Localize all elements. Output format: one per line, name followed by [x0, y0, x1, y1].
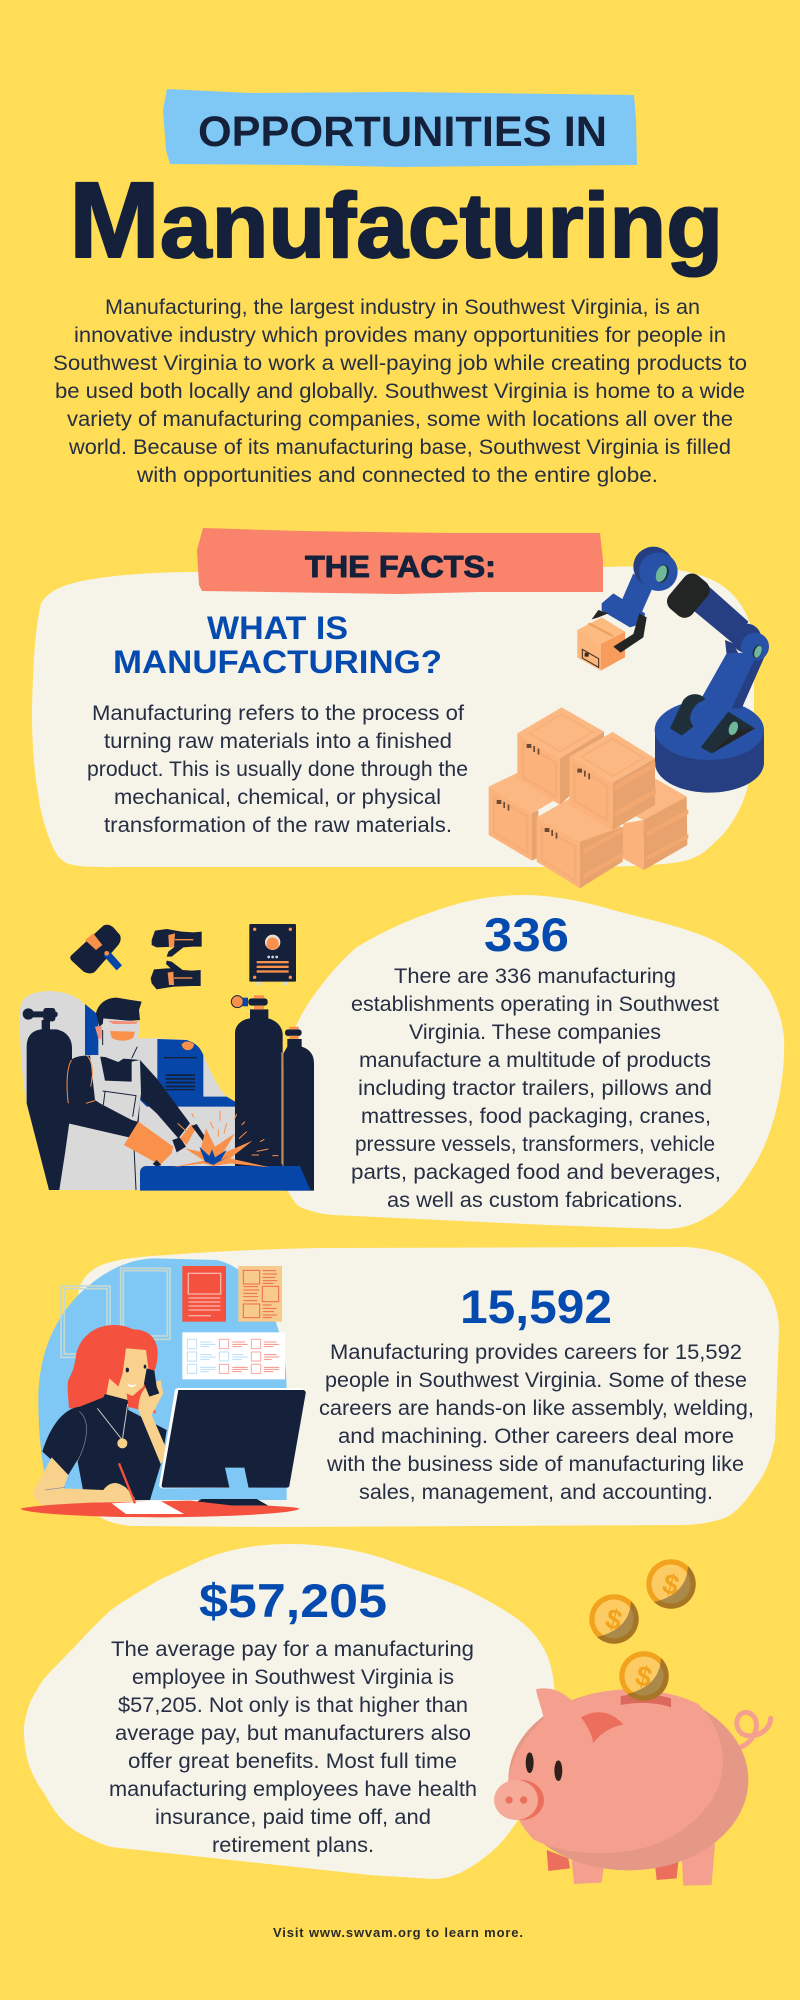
text: 336 description: including tractor trailers, pillows and: [358, 1077, 712, 1100]
illustration: piggy bank: [494, 1688, 771, 1886]
text: manufacturing definition: transformation of the raw materials.: [104, 814, 452, 837]
text: pay description: $57,205. Not only is that higher than: [118, 1694, 468, 1717]
stat: 336: 336: [484, 908, 569, 961]
pig body highlight: [508, 1689, 723, 1853]
poster orange: [238, 1266, 282, 1322]
footer text: Visit www.swvam.org to learn more.: [273, 1925, 523, 1940]
pig back legs: [547, 1850, 678, 1880]
text: 336 description: parts, packaged food and beverages,: [351, 1161, 721, 1184]
heading: what is manufacturing: WHAT IS: [207, 610, 348, 646]
illustration: woman at desk: [21, 1258, 306, 1517]
text: 336 description: as well as custom fabrications.: [387, 1189, 683, 1212]
text: manufacturing definition: Manufacturing refers to the process of: [92, 702, 464, 725]
robot base: [655, 700, 764, 793]
intro text block: with opportunities and connected to the entire globe.: [136, 464, 658, 487]
text: careers description: and machining. Other careers deal more: [338, 1425, 734, 1448]
text: manufacturing definition: [87, 702, 468, 837]
pig eyes: [526, 1752, 562, 1781]
panel: $57,205 pay: [24, 1544, 555, 1879]
text: 336 description: manufacture a multitude of products: [359, 1049, 711, 1072]
intro text block: variety of manufacturing companies, some with locations all over the: [67, 408, 733, 431]
banner: the facts: [197, 528, 603, 594]
text: careers description: careers are hands-on like assembly, welding,: [319, 1397, 754, 1420]
wall frames: [61, 1268, 170, 1357]
title: Manufacturing: [69, 159, 723, 280]
checklist: [182, 1332, 285, 1379]
coin top right: [646, 1559, 696, 1609]
text: pay description: employee in Southwest Virginia is: [132, 1666, 454, 1689]
text: careers description: [319, 1341, 754, 1504]
illustration: robot arm and boxes: [489, 547, 769, 888]
text: 336 description: [351, 965, 721, 1212]
text: 336 description: There are 336 manufacturing: [394, 965, 676, 988]
gas cylinder left: [23, 1008, 72, 1190]
poster red: [182, 1266, 226, 1322]
coins: [589, 1559, 696, 1701]
carried box: [577, 617, 625, 671]
text: careers description: people in Southwest Virginia. Some of these: [325, 1369, 747, 1392]
panel: what is manufacturing: [32, 566, 754, 867]
ear patch: [581, 1712, 623, 1743]
text: pay description: [109, 1638, 477, 1857]
heading banner: opportunities in: [163, 89, 637, 167]
intro text block: world. Because of its manufacturing base, Southwest Virginia is filled: [68, 436, 731, 459]
intro text block: Southwest Virginia to work a well-paying job while creating products to: [53, 352, 747, 375]
coin top right: $: [659, 1567, 683, 1602]
computer monitor: [159, 1388, 306, 1506]
intro text block: Manufacturing, the largest industry in Southwest Virginia, is an: [105, 296, 700, 319]
text: manufacturing definition: product. This is usually done through the: [87, 758, 468, 781]
crate stack: [489, 707, 688, 888]
banner: the facts: THE FACTS:: [305, 549, 496, 584]
heading banner: opportunities in: OPPORTUNITIES IN: [198, 108, 607, 156]
heading: what is manufacturing: MANUFACTURING?: [113, 644, 442, 680]
text: pay description: offer great benefits. Most full time: [128, 1750, 457, 1773]
stat: $57,205: $57,205: [199, 1574, 387, 1627]
coin left: $: [602, 1602, 626, 1637]
text: pay description: retirement plans.: [212, 1834, 374, 1857]
stat: 15,592: 15,592: [460, 1280, 612, 1333]
text: pay description: average pay, but manufacturers also: [115, 1722, 471, 1745]
text: manufacturing definition: mechanical, chemical, or physical: [114, 786, 441, 809]
pig ear: [536, 1688, 575, 1725]
blue machine: [85, 1004, 235, 1107]
icon: welding gloves: [151, 929, 202, 989]
text: manufacturing definition: turning raw materials into a finished: [104, 730, 452, 753]
text: careers description: sales, management, and accounting.: [359, 1481, 713, 1504]
text: 336 description: mattresses, food packaging, cranes,: [361, 1105, 711, 1128]
text: pay description: manufacturing employees have health: [109, 1778, 477, 1801]
text: 336 description: establishments operating in Southwest: [351, 993, 719, 1016]
crate back right: [623, 778, 688, 870]
heading: what is manufacturing: [113, 610, 442, 680]
pig tail: [737, 1712, 771, 1747]
gas cylinder short: [281, 1027, 314, 1191]
blue backdrop: [38, 1258, 287, 1500]
welding sparks: [172, 1111, 278, 1167]
welding table: [140, 1166, 311, 1191]
text: 336 description: Virginia. These companies: [409, 1021, 661, 1044]
crate upper center: [569, 732, 656, 830]
text: pay description: insurance, paid time off, and: [155, 1806, 431, 1829]
coin bottom: $: [632, 1659, 656, 1694]
intro text block: be used both locally and globally. Southwest Virginia is home to a wide: [55, 380, 745, 403]
welder figure: [66, 998, 207, 1190]
icon: welding helmet: [70, 925, 122, 973]
coin bottom: [619, 1651, 669, 1701]
pig snout: [494, 1780, 544, 1820]
woman figure: [34, 1325, 168, 1507]
icon: control panel: [249, 924, 296, 985]
text: careers description: with the business side of manufacturing like: [326, 1453, 744, 1476]
desk: [21, 1463, 299, 1517]
coin slot: [621, 1694, 671, 1707]
pig front legs: [572, 1843, 715, 1886]
intro text block: [53, 296, 747, 487]
panel: 336 establishments: [280, 895, 784, 1229]
text: pay description: The average pay for a manufacturing: [111, 1638, 474, 1661]
crate lower left: [489, 772, 555, 861]
workshop backdrop: [20, 991, 235, 1190]
intro text block: innovative industry which provides many opportunities for people in: [74, 324, 726, 347]
robot arm: [592, 547, 769, 753]
gas cylinder tall: [231, 995, 283, 1168]
coin left: [589, 1594, 639, 1644]
panel: 15,592 careers: [78, 1247, 779, 1527]
illustration: welder: [20, 924, 314, 1191]
text: 336 description: pressure vessels, transformers, vehicle: [355, 1133, 715, 1156]
text: careers description: Manufacturing provides careers for 15,592: [330, 1341, 742, 1364]
pig body: [508, 1690, 748, 1870]
crate top left: [517, 707, 604, 805]
gripper claw: [613, 613, 647, 653]
crate lower center: [537, 798, 623, 888]
